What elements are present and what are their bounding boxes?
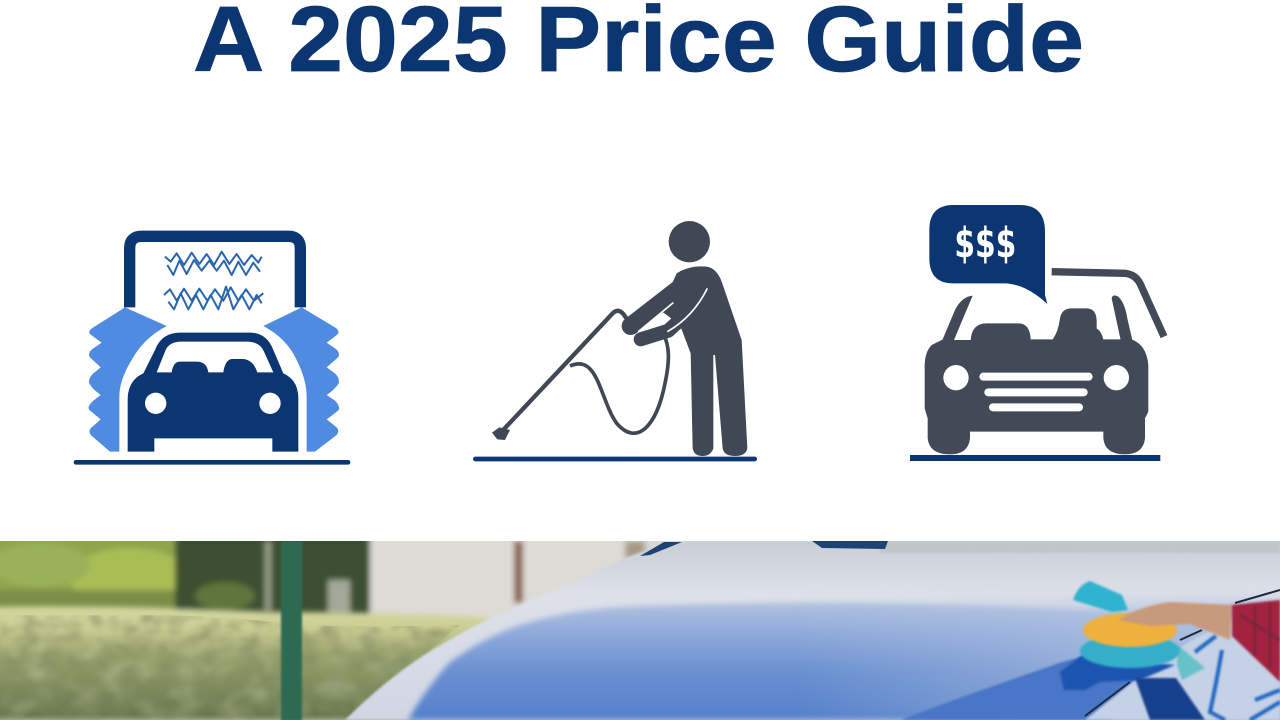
lower arm — [641, 300, 702, 339]
right windshield pillar — [1112, 295, 1133, 342]
ground line — [475, 452, 755, 466]
blue reflections — [1195, 636, 1280, 720]
wand nozzle — [492, 427, 510, 440]
ground line — [76, 455, 348, 469]
dollar signs: $$$ — [954, 219, 1016, 268]
right brush — [263, 307, 339, 452]
icon: automatic car wash — [76, 236, 348, 462]
shadow under sponge — [1060, 655, 1175, 690]
car hood — [345, 541, 1280, 720]
price speech bubble — [929, 205, 1047, 304]
icon: person with pressure washer — [475, 221, 755, 459]
left brush — [89, 307, 167, 452]
arm highlights — [638, 288, 707, 332]
green pole — [281, 541, 302, 720]
car body — [128, 333, 298, 452]
body and legs — [660, 266, 747, 456]
plaid sleeve — [1232, 600, 1280, 682]
lower fender — [900, 657, 1136, 720]
sleeve plaid lines — [1240, 603, 1280, 668]
left windshield pillar — [942, 296, 973, 342]
hood right fade — [852, 596, 1274, 718]
left headlight — [943, 365, 969, 390]
hedge — [0, 607, 490, 720]
wash gantry frame — [130, 236, 300, 307]
right headlight — [259, 393, 281, 414]
teal sponge — [1080, 634, 1180, 668]
ground line — [910, 455, 1160, 461]
upper arm — [631, 280, 690, 326]
head — [669, 221, 710, 262]
top sky strip — [880, 541, 1280, 553]
photo: hand polishing a blue car hood — [0, 535, 1280, 720]
teal cloth — [1073, 581, 1128, 612]
hood paint — [408, 600, 1280, 720]
cloth lower corner — [1177, 645, 1205, 680]
car body — [925, 308, 1148, 454]
blurred background — [0, 535, 1280, 720]
icon: car detailing cost — [910, 205, 1164, 461]
grille bars — [979, 373, 1093, 411]
hose — [570, 335, 668, 433]
pressure wand — [501, 311, 630, 433]
side window area — [1084, 622, 1280, 720]
right headlight — [1104, 365, 1129, 390]
car windshield — [157, 342, 273, 372]
wiper marks — [640, 541, 888, 556]
dark car trim line — [1085, 590, 1280, 716]
yellow sponge — [1083, 613, 1177, 647]
hedge texture — [0, 615, 470, 720]
left headlight — [145, 393, 166, 414]
water squiggles — [164, 252, 263, 309]
dark blue column — [1135, 678, 1205, 720]
hand — [1118, 602, 1232, 640]
open hood outline — [1052, 272, 1164, 337]
